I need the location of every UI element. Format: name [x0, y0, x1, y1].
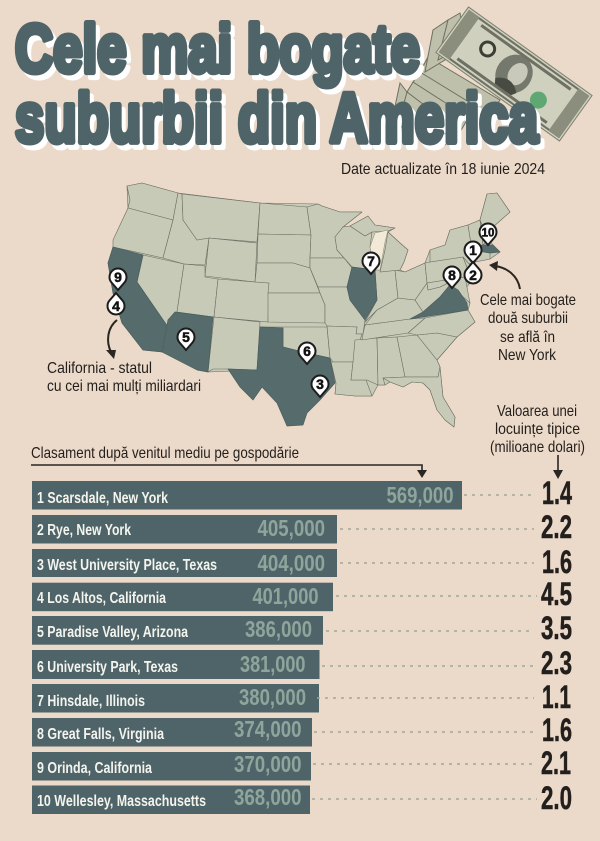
row 9: Orinda: 9 Orinda, California — [37, 760, 152, 777]
row 4: Los Altos: 4 Los Altos, California — [37, 590, 166, 607]
row 8: Great Falls: 8 Great Falls, Virginia — [37, 726, 164, 743]
row 7: Hinsdale: 1.1 — [542, 679, 571, 715]
map pin 2 — [464, 262, 482, 283]
arrow: California callout — [106, 320, 117, 359]
map pin 10 — [480, 224, 496, 245]
heading: typical home value: locuințe tipice — [495, 421, 580, 438]
callout: New York: Cele mai bogate — [480, 292, 576, 309]
row 4: Los Altos: 401,000 — [252, 583, 318, 609]
row 2: Rye — [32, 509, 572, 545]
row 6: University Park — [32, 645, 572, 681]
map pin 8: 8 — [448, 267, 456, 283]
row 8: Great Falls: 374,000 — [234, 716, 302, 742]
row 9: Orinda: 2.1 — [541, 745, 571, 781]
row 9: Orinda — [32, 745, 571, 781]
date note: Date actualizate în 18 iunie 2024 — [341, 161, 545, 178]
row 6: University Park: 6 University Park, Texas — [37, 659, 178, 676]
row 6: University Park: 381,000 — [240, 651, 306, 677]
row 8: Great Falls: 1.6 — [542, 712, 572, 748]
map pin 7: 7 — [367, 253, 375, 269]
map pin 4: 4 — [112, 298, 120, 314]
row 5: Paradise Valley — [32, 610, 572, 646]
row 7: Hinsdale: 380,000 — [239, 684, 306, 710]
arrow: New York callout — [489, 261, 520, 289]
map pin 1 — [464, 242, 482, 263]
row 1: Scarsdale: 1 Scarsdale, New York — [37, 490, 168, 507]
title — [15, 11, 543, 162]
row 10: Wellesley: 10 Wellesley, Massachusetts — [37, 793, 206, 810]
map pin 9 — [110, 269, 126, 290]
row 5: Paradise Valley: 3.5 — [541, 610, 572, 646]
row 1: Scarsdale: 569,000 — [386, 482, 454, 508]
callout: California: cu cei mai mulți miliardari — [47, 378, 201, 395]
heading: ranking by income: Clasament după venitul mediu pe gospodărie — [31, 445, 299, 462]
map pin 5: 5 — [182, 329, 190, 345]
row 4: Los Altos: 4.5 — [541, 576, 572, 612]
callout: New York: se află în — [500, 329, 555, 346]
row 1: Scarsdale: 1.4 — [542, 475, 572, 511]
map pin 1: 1 — [469, 242, 477, 258]
map pin 7 — [362, 253, 380, 274]
callout: New York: două suburbii — [488, 310, 568, 327]
row 2: Rye: 405,000 — [258, 515, 325, 541]
map pin 10: 10 — [482, 228, 494, 240]
row 9: Orinda: 370,000 — [234, 751, 302, 777]
title: Cele mai bogate — [19, 16, 424, 92]
row 10: Wellesley: 368,000 — [234, 784, 302, 810]
row 2: Rye: 2 Rye, New York — [37, 522, 131, 539]
row 3: West University Place: 3 West University Place, Texas — [37, 557, 217, 574]
map pin 3: 3 — [316, 376, 324, 392]
row 3: West University Place — [32, 544, 572, 580]
map pin 3 — [312, 376, 328, 397]
row 5: Paradise Valley: 386,000 — [245, 616, 312, 642]
map pin 8 — [444, 267, 460, 288]
title: Cele mai bogate — [15, 11, 420, 87]
row 4: Los Altos — [32, 576, 572, 612]
map pin 6: 6 — [303, 343, 311, 359]
map pin 5 — [178, 329, 194, 350]
row 6: University Park: 2.3 — [541, 645, 572, 681]
icon: stack of dollar bills — [390, 7, 592, 145]
row 2: Rye: 2.2 — [541, 509, 572, 545]
callout: New York: New York — [498, 347, 557, 364]
row 3: West University Place: 404,000 — [258, 550, 325, 576]
row 1: Scarsdale — [32, 475, 572, 511]
row 3: West University Place: 1.6 — [542, 544, 572, 580]
arrow: home value — [553, 455, 563, 479]
heading: typical home value — [490, 403, 585, 456]
row 5: Paradise Valley: 5 Paradise Valley, Arizona — [37, 624, 188, 641]
callout: New York — [480, 292, 576, 364]
row 7: Hinsdale — [32, 679, 571, 715]
map pin 4 — [108, 293, 124, 314]
row 7: Hinsdale: 7 Hinsdale, Illinois — [37, 693, 145, 710]
heading: typical home value: Valoarea unei — [497, 403, 577, 420]
row 10: Wellesley — [32, 780, 572, 816]
map pin 9: 9 — [114, 269, 122, 285]
callout: California — [47, 360, 201, 395]
arrow: ranking — [31, 465, 427, 478]
row 8: Great Falls — [32, 712, 572, 748]
map of the United States — [108, 183, 510, 427]
map pin 6 — [298, 343, 316, 364]
callout: California: California - statul — [47, 360, 152, 377]
map pin 2: 2 — [469, 267, 477, 283]
row 10: Wellesley: 2.0 — [541, 780, 572, 816]
